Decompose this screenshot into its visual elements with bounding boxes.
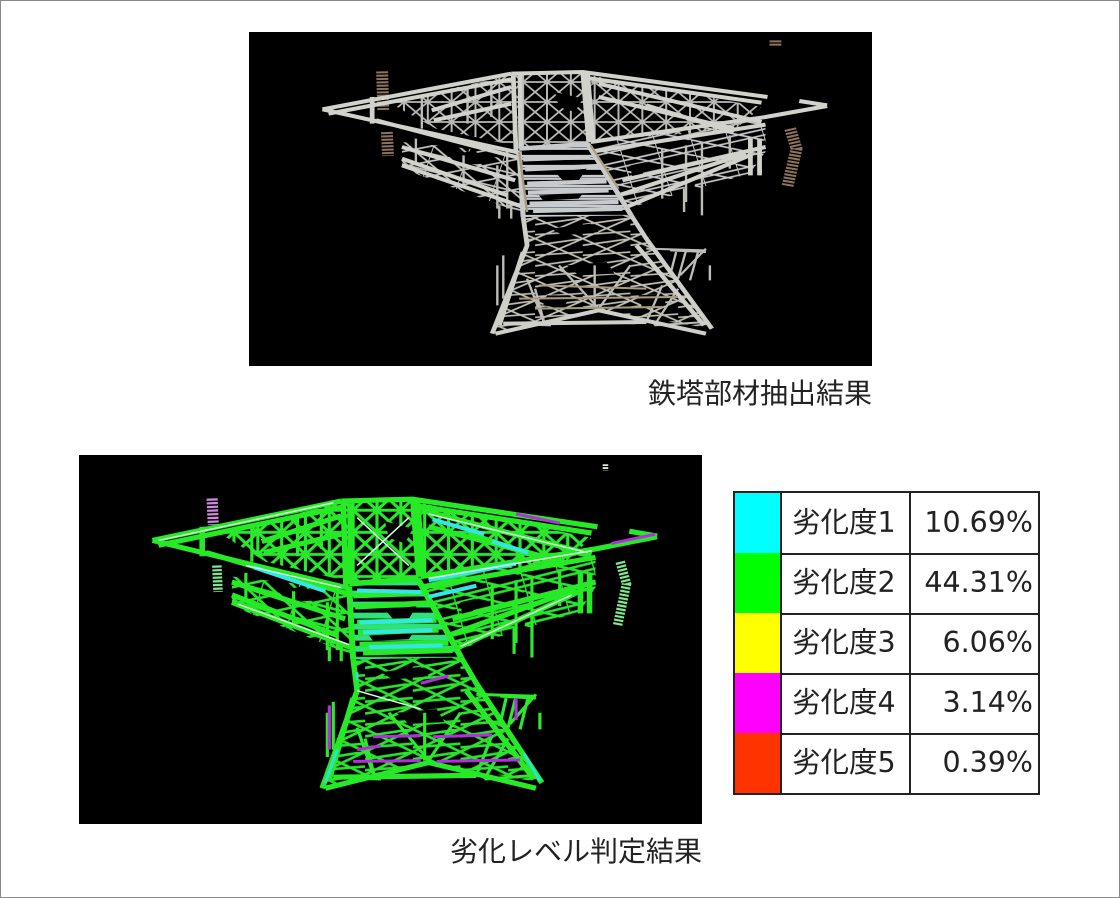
row: level 5: 0.39% xyxy=(942,746,1033,779)
body rungs and legs xyxy=(519,144,631,217)
row: level 4: 3.14% xyxy=(942,686,1033,719)
thin bracing xyxy=(416,82,730,325)
body rungs and legs xyxy=(349,578,461,659)
photo panel: deterioration level result xyxy=(79,455,702,824)
row: level 5: 劣化度5 xyxy=(792,746,896,779)
caption: extraction result: 鉄塔部材抽出結果 xyxy=(648,378,872,409)
photo panel: extracted tower members xyxy=(249,32,872,366)
level 4 magenta members xyxy=(329,514,655,761)
main chords xyxy=(323,72,827,207)
caption: deterioration level result: 劣化レベル判定結果 xyxy=(450,836,702,867)
tan highlights xyxy=(519,145,678,309)
row: level 1 xyxy=(735,493,1038,555)
row: level 4: 劣化度4 xyxy=(792,686,896,719)
thin bracing xyxy=(246,510,560,779)
row: level 4 xyxy=(735,673,1038,735)
row: level 2 xyxy=(735,553,1038,615)
row: level 1: 劣化度1 xyxy=(792,506,896,539)
row: level 2: 44.31% xyxy=(924,566,1033,599)
lattice mass xyxy=(402,142,523,214)
row: level 1: 10.69% xyxy=(924,506,1033,539)
pale highlights xyxy=(158,503,592,709)
row: level 2: 劣化度2 xyxy=(792,566,896,599)
lattice mass xyxy=(232,577,353,656)
insulators xyxy=(212,498,213,525)
row: level 3: 6.06% xyxy=(942,626,1033,659)
insulators xyxy=(382,40,797,187)
tower point cloud coloured by deterioration xyxy=(153,464,657,794)
legend table xyxy=(733,491,1040,795)
black gaps xyxy=(448,92,706,339)
row: level 3 xyxy=(735,613,1038,675)
tower point cloud in natural colours xyxy=(323,40,827,339)
main chords xyxy=(153,499,657,648)
row: level 3: 劣化度3 xyxy=(792,626,896,659)
row: level 5 xyxy=(735,733,1033,793)
black gaps xyxy=(278,521,536,794)
level 1 cyan members xyxy=(254,519,528,647)
